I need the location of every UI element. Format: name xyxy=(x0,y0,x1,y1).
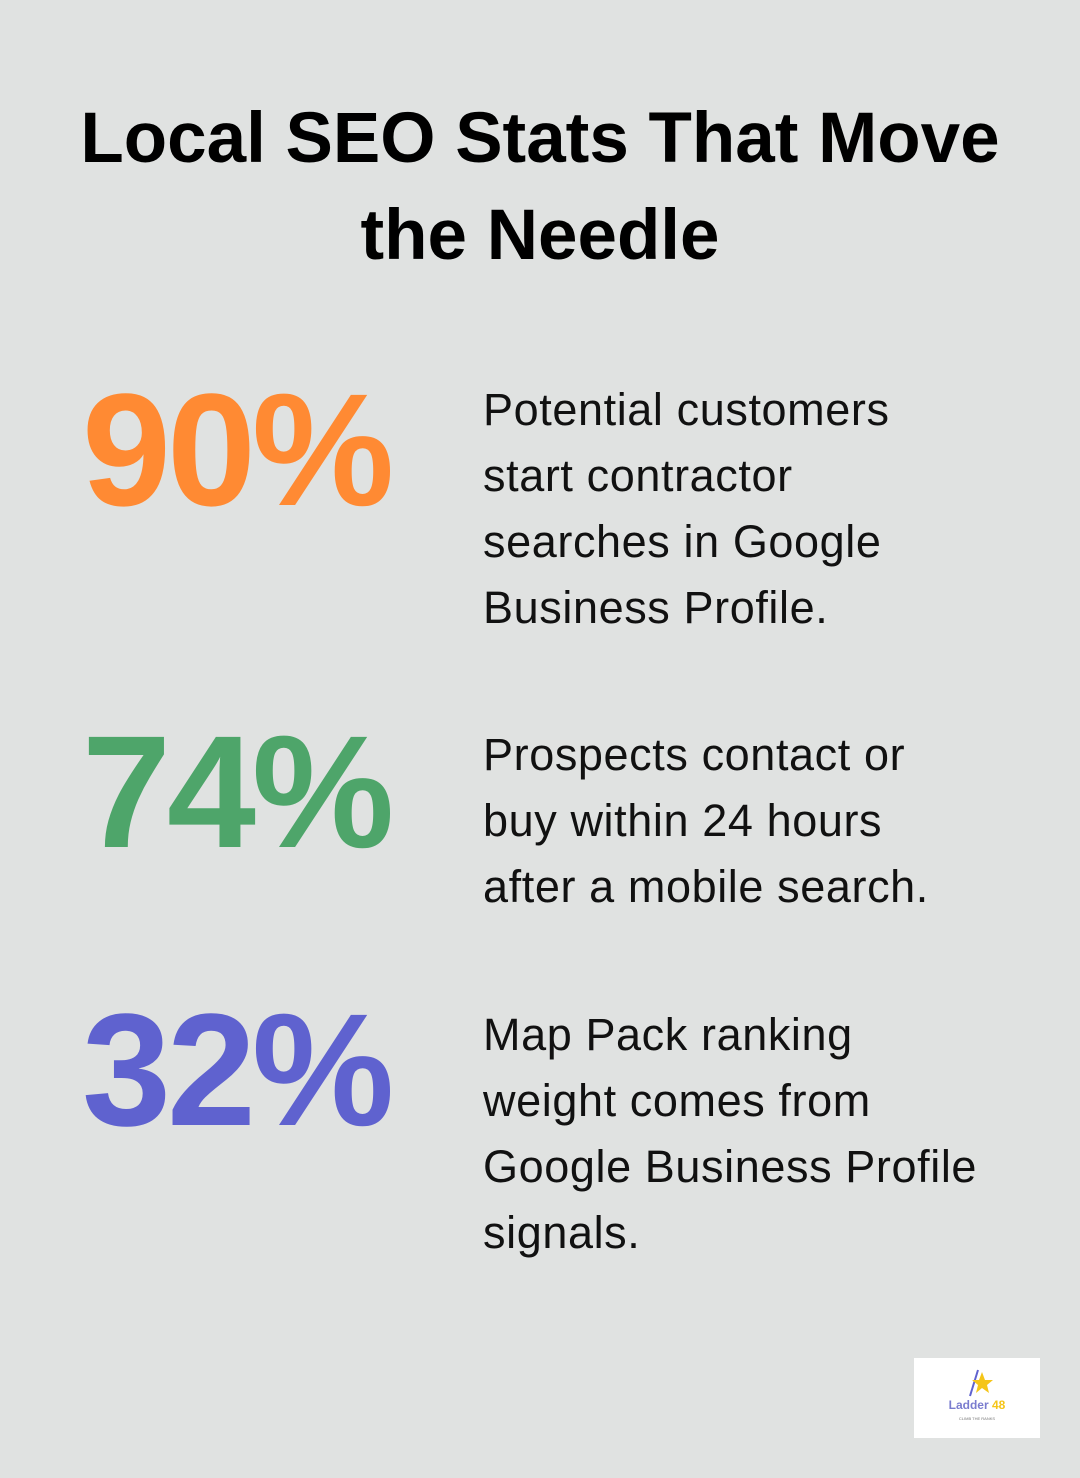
description: 32% xyxy=(483,1009,977,1258)
stat: 90%: 90% xyxy=(82,360,390,539)
logo: Ladder 48: Ladder 48 xyxy=(949,1398,1005,1412)
description: 32%: weight comes from xyxy=(483,1075,871,1126)
description: 32%: signals. xyxy=(483,1207,640,1258)
description: 74%: buy within 24 hours xyxy=(483,795,882,846)
title: Local SEO Stats That Move xyxy=(80,99,1000,178)
title: the Needle xyxy=(360,196,720,275)
description: 32%: Google Business Profile xyxy=(483,1141,977,1192)
description: 74%: after a mobile search. xyxy=(483,861,929,912)
description: 90%: Business Profile. xyxy=(483,582,828,633)
logo: Ladder 48 xyxy=(914,1358,1040,1438)
description: 90%: searches in Google xyxy=(483,516,882,567)
description: 74% xyxy=(483,729,929,912)
description: 90% xyxy=(483,384,890,633)
stat: 32%: 32% xyxy=(82,980,390,1159)
stat: 74%: 74% xyxy=(82,702,390,881)
logo: Ladder 48: CLIMB THE RANKS xyxy=(959,1416,995,1421)
description: 90%: Potential customers xyxy=(483,384,890,435)
description: 32%: Map Pack ranking xyxy=(483,1009,853,1060)
description: 74%: Prospects contact or xyxy=(483,729,905,780)
description: 90%: start contractor xyxy=(483,450,793,501)
title xyxy=(80,99,1000,275)
